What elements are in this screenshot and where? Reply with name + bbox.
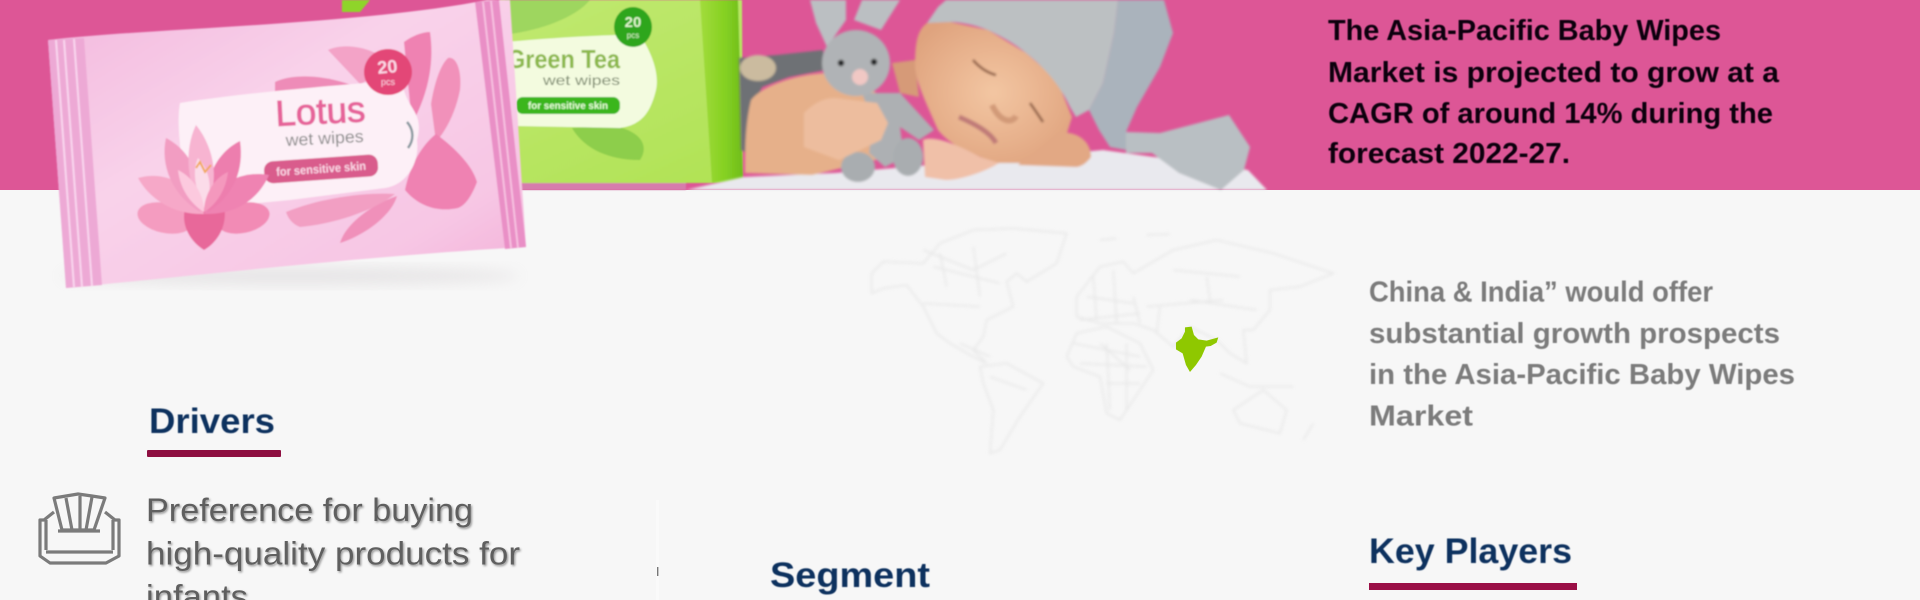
icon: tissue box (40, 494, 119, 563)
lotus pack label (179, 80, 419, 210)
lotus pack name: Lotus (274, 88, 366, 134)
baby photo (686, 0, 1267, 190)
green pack badge: pcs (627, 31, 639, 40)
lotus pack subtitle: wet wipes (284, 127, 364, 150)
green pack pill: for sensitive skin (528, 101, 608, 112)
hat tail (1089, 0, 1173, 150)
Drivers heading: Drivers (149, 402, 275, 441)
green tea wipes pack (342, 0, 743, 190)
green pack name: Green Tea (507, 44, 620, 74)
driver text: high-quality products for (146, 536, 520, 572)
lotus pack shadow (60, 267, 520, 285)
world map with India highlighted (872, 228, 1333, 453)
baby head (915, 22, 1072, 163)
baby arm and torso (745, 73, 890, 175)
knitted hat (927, 0, 1118, 117)
pink header band (0, 0, 1920, 190)
lotus pack badge (364, 49, 412, 95)
green pack label (505, 35, 657, 128)
baby hand on bunny (804, 98, 888, 160)
lotus pack pill: for sensitive skin (276, 159, 366, 179)
green pack subtitle: wet wipes (542, 72, 620, 88)
regional growth statement: Market (1369, 400, 1474, 432)
CAGR statement: CAGR of around 14% during the (1328, 98, 1773, 130)
toy bunny (810, 0, 934, 182)
Drivers heading (147, 402, 281, 457)
green pack pill (516, 97, 620, 114)
Key Players heading: Key Players (1369, 532, 1572, 571)
regional growth statement: substantial growth prospects (1369, 318, 1780, 350)
baby hand under chin (923, 139, 999, 180)
Segment heading: Segment (770, 556, 930, 595)
CAGR statement: Market is projected to grow at a (1328, 57, 1780, 89)
facial features (959, 60, 1043, 143)
CAGR statement: The Asia-Pacific Baby Wipes (1328, 15, 1721, 47)
CAGR statement (1328, 15, 1780, 170)
lotus pack badge: pcs (381, 77, 395, 87)
lotus pack pill (263, 154, 379, 184)
continent outlines (872, 228, 1333, 453)
knitted diaper (739, 50, 825, 153)
driver text (146, 492, 520, 600)
baby arm under head (1018, 132, 1091, 167)
green pack badge: 20 (625, 14, 641, 31)
column scratch mark (656, 500, 659, 600)
white surface (686, 150, 1267, 190)
hat tassel (1126, 115, 1250, 190)
green pack badge (614, 7, 652, 47)
driver text: Preference for buying (146, 492, 473, 528)
lotus flower illustration (134, 125, 273, 250)
CAGR statement: forecast 2022-27. (1328, 138, 1570, 170)
faint cut-off text row (1400, 445, 1774, 449)
baby shoulder (892, 60, 919, 97)
lotus pack badge: 20 (376, 56, 398, 78)
regional growth statement: China & India” would offer (1369, 276, 1713, 308)
lotus wipes pack (48, 0, 526, 288)
regional growth statement: in the Asia-Pacific Baby Wipes (1369, 359, 1795, 391)
India highlight (1176, 327, 1218, 372)
lotus background petals (275, 32, 477, 243)
regional growth statement (1369, 276, 1795, 432)
Key Players heading (1369, 532, 1577, 590)
